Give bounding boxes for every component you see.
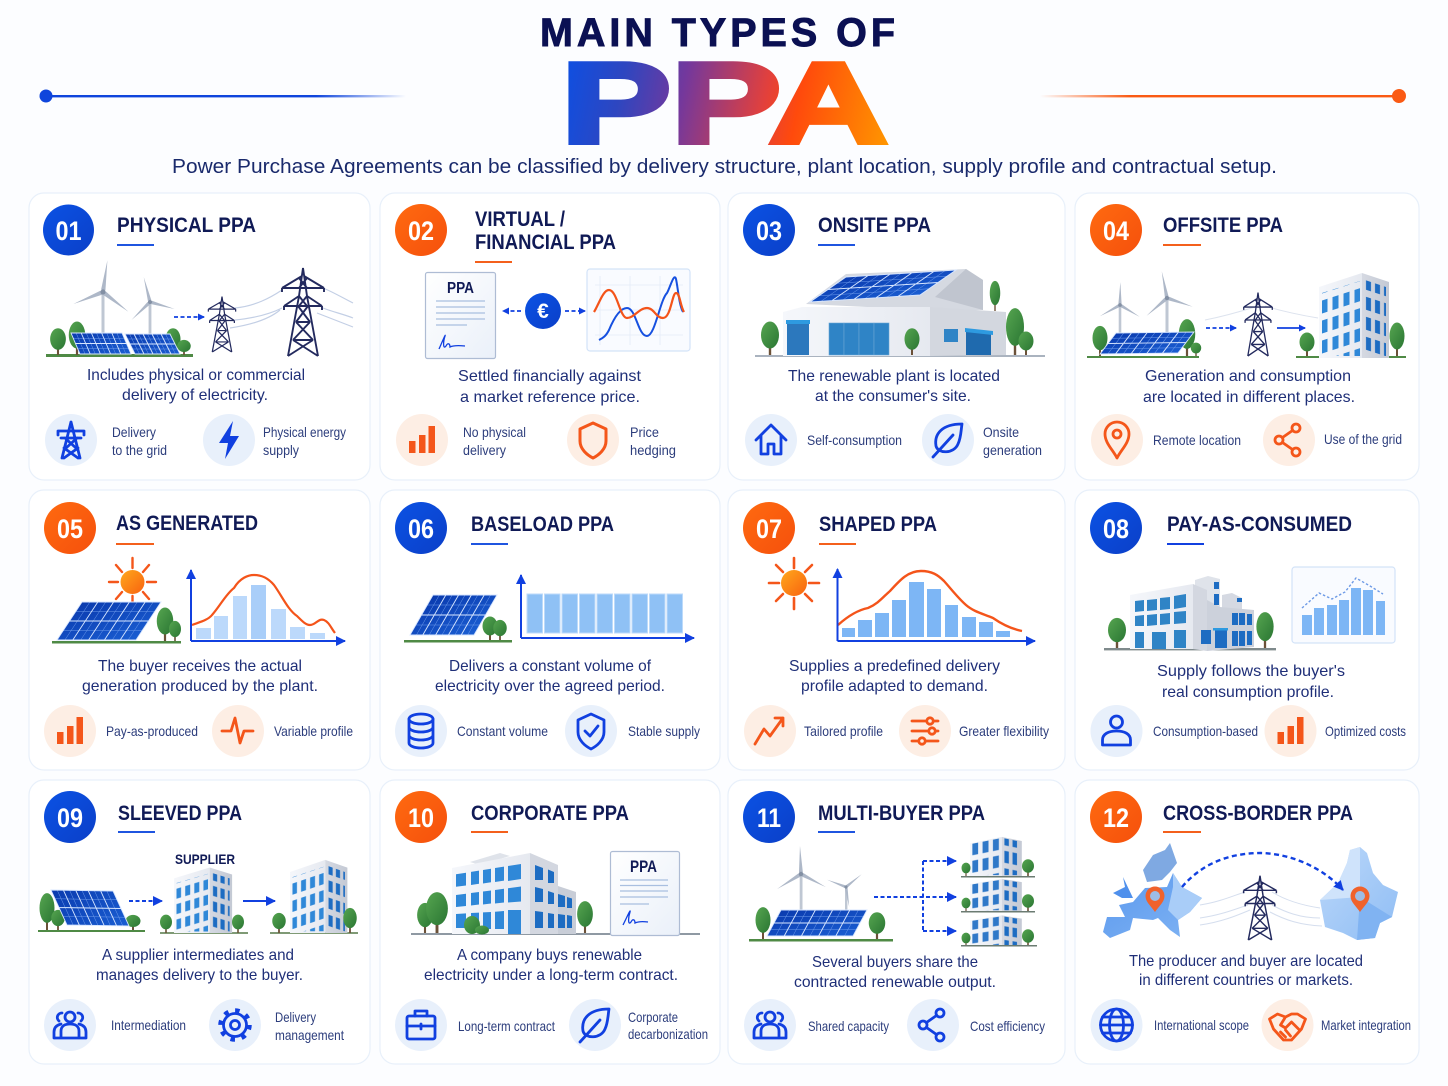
feature: delivery management: Delivery [275,1009,316,1025]
feature: optimized costs: Optimized costs [1325,723,1406,739]
feature: remote location [1091,414,1241,466]
heading: AS GENERATED [116,512,258,535]
panel: 09 sleeved PPA [29,780,370,1064]
panel: 12 cross-border PPA [1075,780,1419,1064]
description [1129,953,1363,989]
panel: 08 pay-as-consumed [1075,490,1419,770]
feature: delivery to the grid [45,414,167,466]
panel: 05 as generated [29,490,370,770]
icon: map pins [1146,886,1370,912]
heading: ONSITE PPA [818,214,931,237]
number badge 03 [743,204,795,256]
feature: physical energy supply: Physical energy [263,424,346,440]
feature: price hedging: hedging [630,442,676,458]
panel: 10 corporate PPA [380,780,720,1064]
heading: SLEEVED PPA [118,802,242,825]
heading: BASELOAD PPA [471,513,614,536]
feature: corporate decarbonization [569,999,708,1051]
feature: no physical delivery: No physical [463,424,526,440]
panel: 02 virtual financial PPA [380,193,720,480]
feature: long-term contract: Long-term contract [458,1018,555,1034]
panel: 06 baseload PPA [380,490,720,770]
feature: greater flexibility: Greater flexibility [959,723,1049,739]
number badge 09 [44,791,96,843]
feature: tailored profile: Tailored profile [804,723,883,739]
number badge 12: 12 [1103,803,1129,833]
illustration: solar to supplier to buyer: SUPPLIER [175,851,235,867]
number badge 12 [1090,791,1142,843]
number badge 02 [395,204,447,256]
feature: use of the grid [1263,414,1402,466]
description: Generation and consumption [1145,368,1351,385]
number badge 06: 06 [408,514,434,544]
arrow: cross-border connection [1182,853,1343,890]
illustration: factory with rooftop solar [755,269,1045,357]
description: electricity over the agreed period. [435,678,665,695]
panel: 03 onsite PPA [728,193,1065,480]
feature: constant volume: Constant volume [457,723,548,739]
feature: self-consumption [745,414,902,466]
description: manages delivery to the buyer. [96,967,303,984]
description: A company buys renewable [457,947,642,964]
feature: stable supply: Stable supply [628,723,700,739]
description [788,368,1000,405]
number badge 07 [743,502,795,554]
heading [475,208,616,254]
illustration: PPA document [610,852,680,936]
illustration: corporate building [411,853,700,935]
heading: CORPORATE PPA [471,802,629,825]
panel: 01 physical PPA [29,193,370,480]
feature: price hedging: Price [630,424,659,440]
number badge 08 [1090,502,1142,554]
number badge 11 [743,791,795,843]
heading: VIRTUAL / [475,208,565,231]
feature: onsite generation: generation [983,442,1042,458]
decorative line left with dot [40,90,406,102]
number badge 07: 07 [756,514,782,544]
feature: optimized costs [1264,705,1406,757]
description [458,368,642,406]
illustration: PPA document [426,272,496,358]
number badge 10 [395,791,447,843]
description: delivery of electricity. [122,387,268,404]
feature: shared capacity [744,999,889,1051]
description: Delivers a constant volume of [449,658,652,675]
description: The producer and buyer are located [1129,953,1363,970]
feature: physical energy supply [203,414,346,466]
title: PPA: PPA [561,40,888,168]
feature: no physical delivery: delivery [463,442,506,458]
feature: corporate decarbonization: decarbonization [628,1026,708,1042]
illustration: solar panel [404,595,512,642]
description [82,658,318,695]
heading: OFFSITE PPA [1163,214,1283,237]
feature: delivery management [209,999,344,1051]
number badge 09: 09 [57,803,83,833]
number badge 03: 03 [756,216,782,246]
illustration: target market map [1320,847,1398,940]
description [87,367,305,404]
heading: SHAPED PPA [819,513,937,536]
number badge 10: 10 [408,803,434,833]
feature: constant volume [395,705,548,757]
feature: long-term contract [395,999,555,1051]
decorative line right with dot [1040,89,1406,103]
illustration: PPA document: PPA [630,857,657,876]
heading: MULTI-BUYER PPA [818,802,985,825]
heading: PHYSICAL PPA [117,214,256,237]
heading: CROSS-BORDER PPA [1163,802,1353,825]
description [794,954,996,991]
description: are located in different places. [1143,389,1355,406]
illustration: solar to supplier to buyer [38,851,358,934]
number badge 05 [44,502,96,554]
illustration: euro link: € [537,300,549,323]
feature: consumption-based: Consumption-based [1153,723,1258,739]
description: contracted renewable output. [794,974,996,991]
description: at the consumer's site. [815,388,971,405]
description [424,947,678,984]
illustration: price chart [587,269,690,351]
feature: international scope: International scope [1154,1017,1249,1033]
feature: shared capacity: Shared capacity [808,1018,889,1034]
illustration: three buyer buildings [961,837,1037,946]
description: real consumption profile. [1162,684,1334,701]
description: Several buyers share the [812,954,978,971]
description: Settled financially against [458,368,642,385]
description [1143,368,1355,406]
feature: international scope [1090,999,1249,1051]
feature: pay-as-produced: Pay-as-produced [106,723,198,739]
feature: intermediation: Intermediation [111,1017,186,1033]
description: electricity under a long-term contract. [424,967,678,984]
feature: onsite generation: Onsite [983,424,1019,440]
feature: corporate decarbonization: Corporate [628,1009,678,1025]
number badge 02: 02 [408,216,434,246]
feature: intermediation [44,999,186,1051]
illustration: map of Europe [1103,843,1202,938]
chart: generation curve [191,570,345,641]
panel: 11 multi-buyer PPA [728,780,1065,1064]
illustration: wind, solar and grid [46,257,353,357]
chart: constant volume [521,575,694,638]
panel: 04 offsite PPA [1075,193,1419,480]
chart: shaped delivery profile [838,569,1035,641]
number badge 08: 08 [1103,514,1129,544]
illustration: pylon and wires [1200,876,1322,940]
feature: onsite generation [922,414,1042,466]
feature: physical energy supply: supply [263,442,299,458]
feature: price hedging [567,414,676,466]
feature: tailored profile [744,705,883,757]
description: profile adapted to demand. [801,678,988,695]
feature: market integration [1262,999,1411,1051]
description [96,947,303,984]
feature: consumption-based [1090,705,1258,757]
description [789,658,1000,695]
description: Includes physical or commercial [87,367,305,384]
panel: 07 shaped PPA [728,490,1065,770]
feature: remote location: Remote location [1153,432,1241,448]
feature: greater flexibility [899,705,1049,757]
title: main types of: MAIN TYPES OF [540,11,895,55]
chart: consumption profile [1292,567,1395,643]
feature: cost efficiency [907,999,1045,1051]
number badge 01 [43,204,94,256]
number badge 04 [1090,204,1142,256]
number badge 11: 11 [757,803,781,833]
description: A supplier intermediates and [102,947,294,964]
arrows: split to buyers [874,861,956,931]
feature: variable profile [212,705,353,757]
feature: use of the grid: Use of the grid [1324,431,1402,447]
feature: stable supply [565,705,700,757]
description: The renewable plant is located [788,368,1000,385]
illustration: sun and solar panel [52,558,181,644]
number badge 05: 05 [57,514,83,544]
illustration: office building [1104,576,1276,651]
number badge 04: 04 [1103,216,1129,246]
feature: cost efficiency: Cost efficiency [970,1018,1045,1034]
heading: PAY-AS-CONSUMED [1167,513,1352,536]
number badge 01: 01 [56,216,82,246]
subtitle: Power Purchase Agreements can be classified by delivery structure, plant location, supply profile and contractual setup. [172,156,1277,178]
illustration: euro link [503,293,585,329]
feature: no physical delivery [396,414,526,466]
feature: delivery to the grid: to the grid [112,442,167,458]
description: generation produced by the plant. [82,678,318,695]
feature: delivery to the grid: Delivery [112,424,156,440]
description: in different countries or markets. [1139,972,1353,989]
illustration: PPA document: PPA [447,280,474,297]
description: The buyer receives the actual [98,658,302,675]
description [1157,663,1345,701]
feature: pay-as-produced [44,705,198,757]
feature: market integration: Market integration [1321,1017,1411,1033]
icon: sun [769,558,819,609]
feature: delivery management: management [275,1027,344,1043]
description [435,658,665,695]
illustration: wind and solar source [749,845,893,942]
feature: self-consumption: Self-consumption [807,432,902,448]
heading: FINANCIAL PPA [475,231,616,254]
illustration: remote generation to building [1087,266,1406,358]
description: a market reference price. [460,389,640,406]
number badge 06 [395,502,447,554]
feature: variable profile: Variable profile [274,723,353,739]
description: Supply follows the buyer's [1157,663,1345,680]
description: Supplies a predefined delivery [789,658,1000,675]
